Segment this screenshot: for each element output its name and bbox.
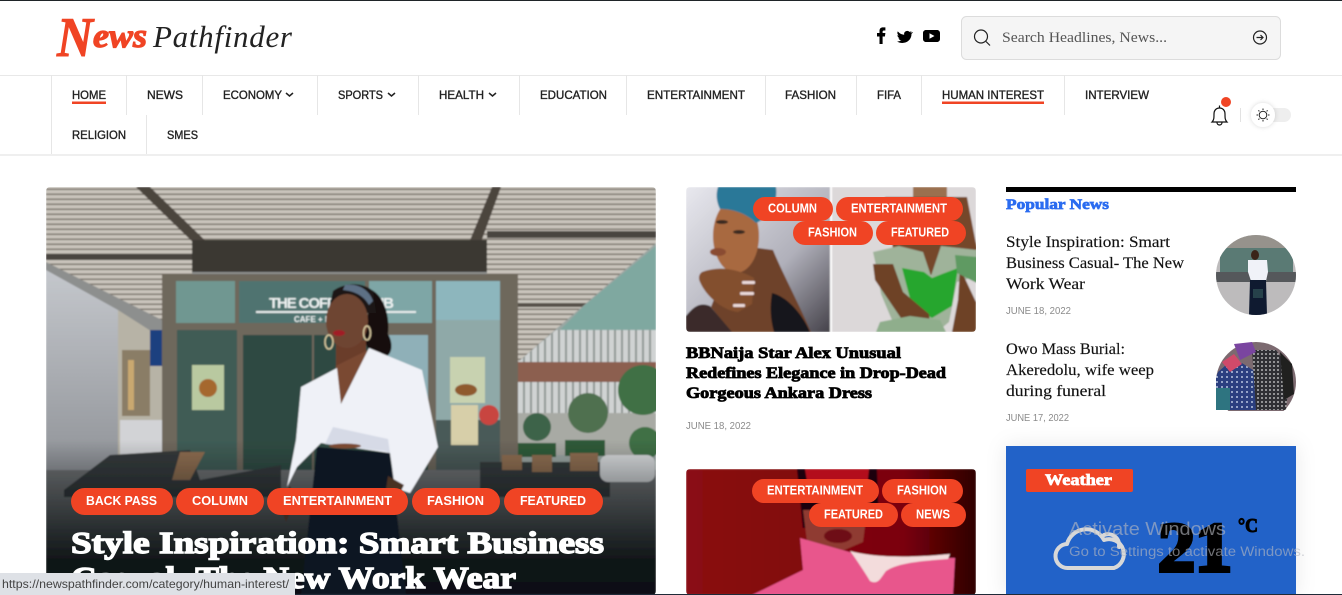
nav items row one: SPORTS (338, 88, 383, 102)
logo: Pathfinder (152, 19, 293, 54)
panel: hero story (46, 187, 668, 595)
nav items row one: EDUCATION (540, 88, 607, 102)
social icons (877, 27, 940, 44)
nav items row two: RELIGION (72, 128, 126, 142)
temperature: 21 (1158, 510, 1232, 587)
hero tags: ENTERTAINMENT (283, 494, 392, 508)
popular item one (1006, 234, 1296, 317)
popular item one: Style Inspiration: Smart (1006, 234, 1171, 251)
Alex story tags: FASHION (808, 226, 857, 240)
popular item two: during funeral (1006, 383, 1107, 400)
nav items row two (72, 128, 198, 142)
red photo tags: ENTERTAINMENT (767, 484, 863, 498)
panel: red fashion photo (686, 469, 976, 595)
icon: twitter (897, 31, 913, 43)
icon: facebook (877, 27, 885, 44)
browser status bar: https://newspathfinder.com/category/human-interest/ (2, 577, 290, 591)
nav items row two: SMES (167, 128, 198, 142)
activate windows watermark: Go to Settings to activate Windows. (1069, 544, 1305, 559)
hero tags: COLUMN (192, 494, 248, 508)
nav items row one: FIFA (877, 88, 901, 102)
logo: ews (93, 18, 147, 55)
red photo tags: FASHION (897, 484, 947, 498)
woman (301, 447, 406, 595)
icon: go arrow (1254, 31, 1266, 44)
Alex story headline: Gorgeous Ankara Dress (686, 385, 872, 402)
hero tags: BACK PASS (86, 494, 157, 508)
temperature: °C (1238, 515, 1258, 537)
Alex story tags (753, 197, 966, 245)
icon: youtube (923, 30, 940, 42)
fade to dark (46, 440, 656, 595)
popular item one: Work Wear (1006, 276, 1086, 293)
theme toggle (1251, 103, 1291, 127)
Alex story headline: Redefines Elegance in Drop-Dead (686, 365, 946, 382)
popular item one: JUNE 18, 2022 (1006, 305, 1071, 317)
weather label (1026, 469, 1133, 492)
red photo tags (752, 479, 966, 527)
popular item two: JUNE 17, 2022 (1006, 412, 1069, 424)
Alex story tags: COLUMN (768, 202, 817, 216)
nav chevrons (286, 93, 496, 96)
left portrait (711, 245, 811, 332)
hero headline: Casual- The New Work Wear (71, 560, 516, 595)
icon: search (974, 30, 990, 46)
popular item one: Business Casual- The New (1006, 255, 1184, 272)
active underlines (72, 102, 1044, 104)
Alex story headline: BBNaija Star Alex Unusual (686, 345, 902, 362)
Alex story headline (686, 345, 946, 402)
navigation bar (0, 75, 1342, 156)
Alex story tags: ENTERTAINMENT (851, 202, 947, 216)
right portrait (912, 187, 948, 197)
hero tags: FEATURED (520, 494, 586, 508)
Alex story tags: FEATURED (891, 226, 949, 240)
panel: weather widget (1006, 446, 1296, 595)
panel: Alex story photo (686, 187, 977, 332)
popular item two: Akeredolu, wife weep (1006, 362, 1154, 379)
logo: N (56, 7, 95, 69)
nav items row one: HUMAN INTEREST (942, 88, 1045, 102)
popular item two (1006, 341, 1296, 424)
nav items row one: NEWS (147, 88, 183, 102)
thumbnail: storefront (1216, 235, 1296, 315)
nav items row one: HOME (72, 88, 106, 102)
store (192, 240, 487, 272)
Alex story date: JUNE 18, 2022 (686, 420, 751, 432)
nav items row one: INTERVIEW (1085, 88, 1150, 102)
left wall (46, 270, 118, 490)
browser status bar (0, 573, 295, 595)
hero tags (71, 488, 603, 515)
ground and furniture (46, 470, 656, 595)
browser bottom edge (0, 594, 1342, 595)
hero photo: coffee club storefront (46, 187, 668, 595)
activate windows watermark (1069, 519, 1305, 559)
activate windows watermark: Activate Windows (1069, 519, 1226, 539)
hero headline: Style Inspiration: Smart Business (71, 525, 604, 560)
icon: cloud (1056, 529, 1124, 568)
nav items row one: HEALTH (439, 88, 484, 102)
logo (56, 7, 293, 69)
right buildings (522, 244, 656, 466)
nav items row one (72, 88, 1150, 102)
icon: notification bell (1212, 97, 1231, 125)
hero headline (71, 525, 604, 595)
popular news heading: Popular News (1006, 197, 1109, 213)
hero tags: FASHION (427, 494, 484, 508)
red photo tags: FEATURED (824, 508, 883, 522)
popular item two: Owo Mass Burial: (1006, 341, 1125, 358)
icon: sun (1256, 108, 1270, 122)
search box (962, 16, 1280, 60)
search placeholder: Search Headlines, News... (1002, 30, 1167, 46)
panel: popular news (1006, 187, 1296, 424)
hero photo: coffee club storefront: CAFE + KITCHEN (294, 315, 361, 324)
nav items row one: FASHION (785, 88, 836, 102)
red photo tags: NEWS (916, 508, 950, 522)
weather label: Weather (1045, 472, 1112, 489)
nav items row one: ENTERTAINMENT (647, 88, 746, 102)
shop sign: THE COFFEE CLUB (269, 295, 394, 312)
thumbnail: funeral (1216, 342, 1296, 411)
nav items row one: ECONOMY (223, 88, 282, 102)
browser top edge (0, 0, 1342, 1)
